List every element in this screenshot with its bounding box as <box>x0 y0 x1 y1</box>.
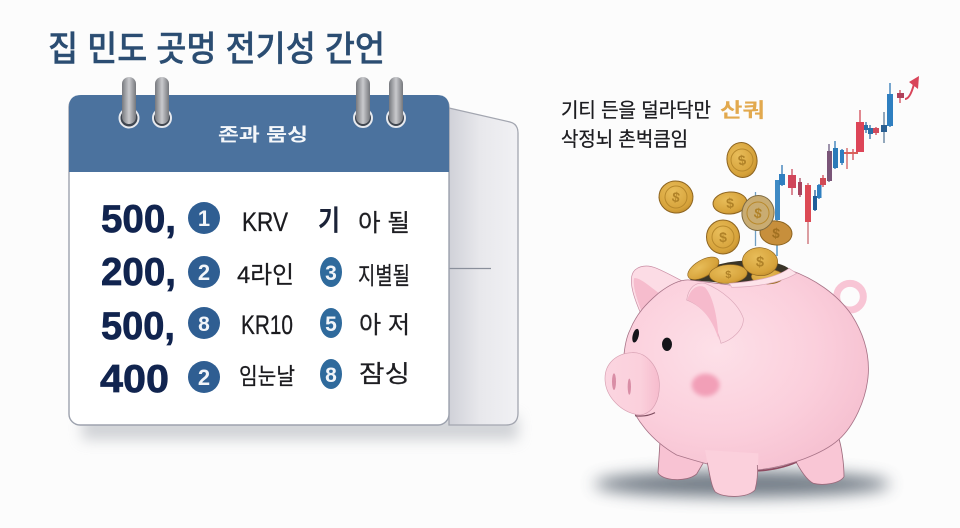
tail loop <box>837 283 863 310</box>
cheek <box>692 374 720 396</box>
far front leg <box>658 442 705 480</box>
row 2: 200, <box>101 251 176 294</box>
callout text <box>561 99 765 151</box>
row 4 <box>100 358 410 401</box>
front leg <box>705 450 758 496</box>
slot rim <box>729 268 797 287</box>
row 3: 5 <box>325 313 337 336</box>
calendar front card <box>69 96 449 425</box>
row 2: 지별될 <box>358 263 410 290</box>
near ear <box>687 283 743 343</box>
coins in slot <box>684 246 783 285</box>
mouth <box>635 413 655 416</box>
calendar header band <box>69 95 449 172</box>
coins in slot: $ <box>725 269 732 281</box>
belly shade <box>757 462 797 471</box>
arrow <box>905 76 919 99</box>
row 1: 기 <box>318 205 340 236</box>
eyes <box>631 328 672 351</box>
row 4: 400 <box>100 358 169 401</box>
row 4: 8 <box>325 364 337 387</box>
callout text: 산쿼 <box>720 99 765 122</box>
row 2 <box>101 251 410 294</box>
calendar back page <box>449 108 518 425</box>
rear leg <box>793 437 844 484</box>
candlestick chart <box>756 76 919 256</box>
title: 집 민도 곳멍 전기성 간언 <box>48 30 385 69</box>
row 4: 잠싱 <box>359 361 410 388</box>
row 2: 4라인 <box>237 262 294 289</box>
snout <box>605 353 659 415</box>
row 1: KRV <box>242 207 288 237</box>
row 1: 1 <box>198 206 210 231</box>
callout text: 삭정뇌 촌벅큼임 <box>561 128 688 151</box>
row 2: 3 <box>325 262 337 285</box>
piggy bank <box>605 246 868 496</box>
row 3: KR10 <box>241 310 293 340</box>
row 3: 8 <box>198 313 210 336</box>
coins in slot: $ <box>755 254 765 271</box>
row 2: 2 <box>198 260 210 285</box>
falling coins: $ <box>726 195 735 211</box>
calendar <box>69 77 518 440</box>
calendar shadow <box>82 416 518 440</box>
row 1: 500, <box>101 198 176 241</box>
row 4: 임눈날 <box>239 363 295 389</box>
calendar header label: 존과 뭄싱 <box>218 125 308 145</box>
row 3: 500, <box>101 305 175 348</box>
row 3 <box>101 305 410 348</box>
far ear <box>631 266 687 313</box>
callout text: 기티 든을 덜라닥만 <box>561 99 711 122</box>
falling coins <box>656 140 793 254</box>
row 3: 아 저 <box>359 312 410 339</box>
row 1 <box>101 198 410 241</box>
binder rings <box>120 77 405 128</box>
row 1: 아 될 <box>358 210 410 237</box>
coin slot opening <box>690 260 790 283</box>
ground shadow <box>594 471 890 497</box>
body <box>623 270 868 470</box>
row 4: 2 <box>198 365 210 390</box>
falling coins: $ <box>771 225 781 241</box>
